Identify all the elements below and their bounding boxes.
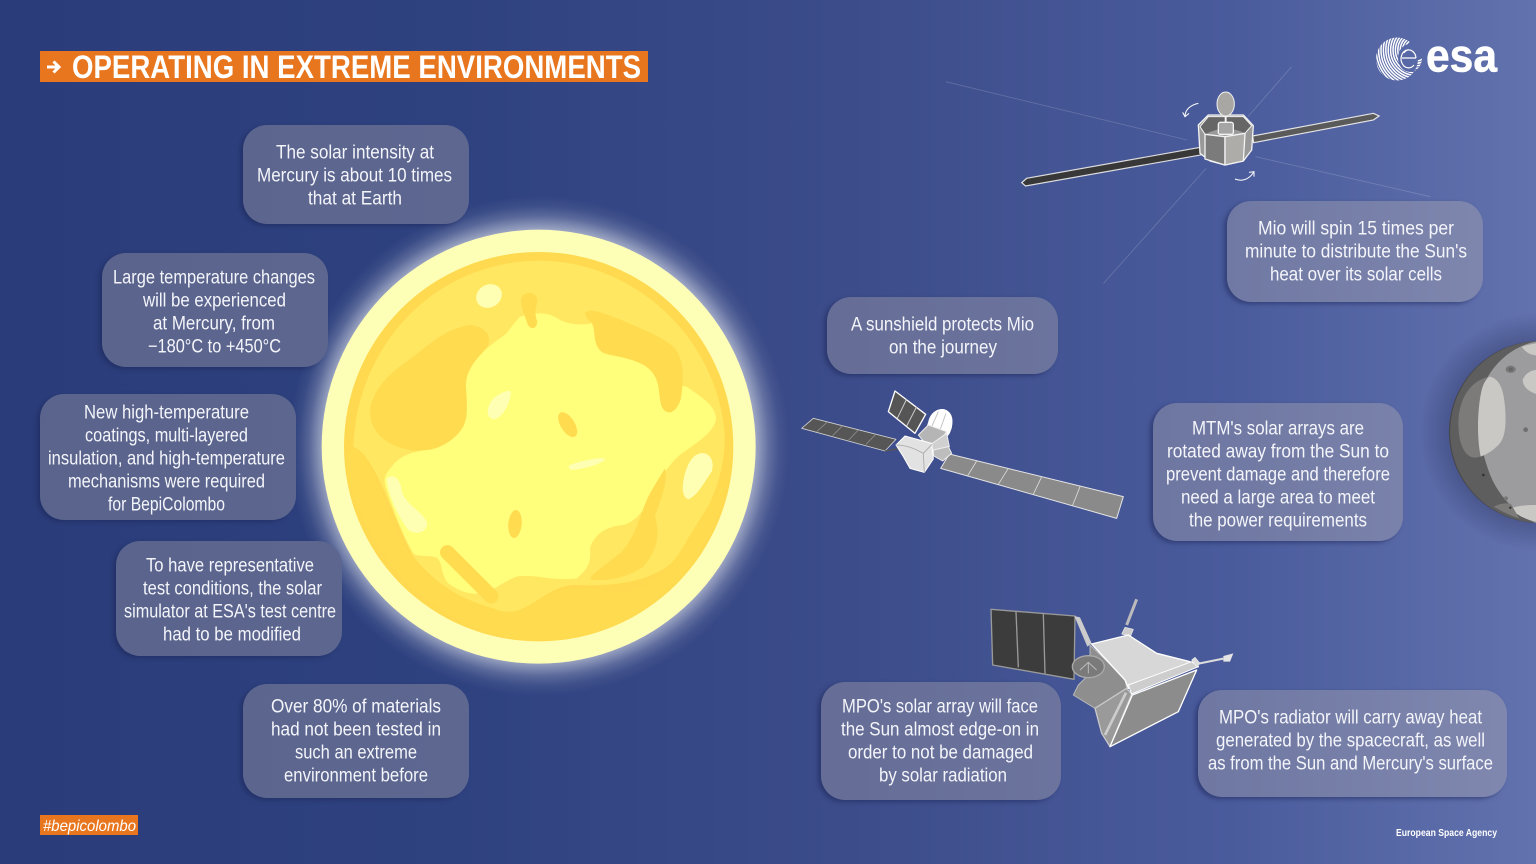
text panel: Mio spin: minute to distribute the Sun's [1245,242,1467,263]
icon: esa logo: esa [1426,30,1497,82]
text panel: temperature changes: at Mercury, from [153,314,275,335]
text panel: materials: environment before [284,766,428,787]
text panel: MTM solar arrays [1153,403,1403,541]
text panel: MPO solar array: order to not be damaged [848,743,1033,764]
text panel: Mio spin: heat over its solar cells [1270,265,1442,286]
text panel: solar intensity [243,125,469,224]
text panel: temperature changes: −180°C to +450°C [148,337,281,358]
sun: dark patches [345,293,725,641]
text panel: test conditions: test conditions, the solar [143,579,323,600]
sun: bright centre [385,313,716,594]
text panel: MPO solar array: MPO's solar array will face [842,697,1038,718]
text panel: MTM solar arrays: need a large area to meet [1181,488,1376,509]
sun: mid yellow layer [353,261,725,613]
text panel: solar intensity: Mercury is about 10 times [257,166,452,187]
text panel: temperature changes: Large temperature changes [113,268,315,289]
text panel: test conditions: had to be modified [163,625,301,646]
text panel: temperature changes [102,253,328,367]
text panel: materials [243,684,469,798]
text panel: new coatings: coatings, multi-layered [85,426,248,447]
text panel: materials: Over 80% of materials [271,697,441,718]
text panel: new coatings [40,394,296,520]
hashtag tag: #bepicolombo [43,818,136,835]
icon: title arrow [47,62,59,72]
icon: rotation arrows [1183,103,1254,180]
text panel: new coatings: for BepiColombo [108,495,225,516]
text panel: new coatings: New high-temperature [84,403,249,424]
text panel: MTM solar arrays: MTM's solar arrays are [1192,419,1364,440]
text panel: temperature changes: will be experienced [142,291,286,312]
sun glow [289,196,789,696]
spacecraft: MPO [991,599,1233,747]
text panel: MPO radiator: generated by the spacecraft, as well [1216,731,1485,752]
spacecraft: MTM [802,391,1123,518]
text panel: sunshield: on the journey [889,338,997,359]
text panel: Mio spin: Mio will spin 15 times per [1258,219,1455,240]
text panel: new coatings: insulation, and high-temperature [48,449,285,470]
icon: esa logo [1376,38,1498,80]
text panel: MPO solar array [821,682,1061,800]
text panel: sunshield: A sunshield protects Mio [851,315,1034,336]
sun: pale highlights [387,280,713,533]
text panel: MPO solar array: the Sun almost edge-on in [841,720,1039,741]
text panel: MTM solar arrays: prevent damage and therefore [1166,465,1390,486]
text panel: test conditions: simulator at ESA's test centre [124,602,336,623]
text panel: MPO radiator: MPO's radiator will carry away heat [1219,708,1483,729]
text panel: test conditions [116,541,342,656]
spacecraft: Mio [946,67,1430,283]
text panel: materials: had not been tested in [271,720,441,741]
text panel: sunshield [827,297,1058,374]
text panel: MPO radiator [1198,690,1507,797]
planet: Mercury [1429,320,1536,544]
text panel: test conditions: To have representative [146,556,314,577]
text panel: solar intensity: The solar intensity at [276,143,435,164]
credit: European Space Agency: European Space Agency [1396,828,1497,839]
text panel: MTM solar arrays: the power requirements [1189,511,1367,532]
Mio: body [1198,92,1253,165]
text panel: new coatings: mechanisms were required [68,472,265,493]
text panel: materials: such an extreme [295,743,417,764]
text panel: MPO radiator: as from the Sun and Mercury's surface [1208,754,1493,775]
sun [322,230,756,664]
text panel: Mio spin [1227,201,1483,302]
title banner: OPERATING IN EXTREME ENVIRONMENTS [72,49,641,85]
text panel: MTM solar arrays: rotated away from the Sun to [1167,442,1389,463]
text panel: MPO solar array: by solar radiation [879,766,1007,787]
text panel: solar intensity: that at Earth [308,189,402,210]
